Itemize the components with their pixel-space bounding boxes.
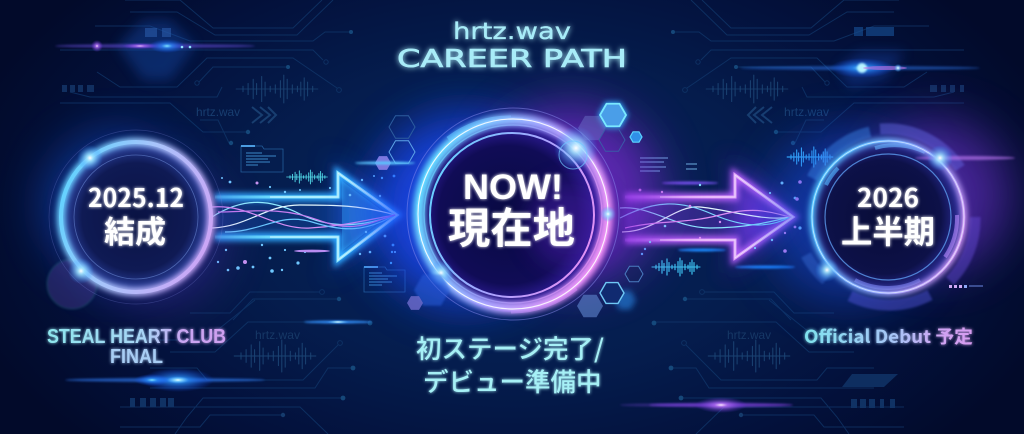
wave strands left — [212, 202, 395, 232]
particles — [217, 175, 802, 273]
data panels and small waveforms — [241, 146, 833, 292]
bright ring centre — [418, 119, 608, 309]
flare bottom right — [649, 397, 793, 413]
waveform above right — [787, 147, 833, 167]
hexagon glowing halo — [598, 102, 628, 128]
faint hexagon top left — [118, 20, 195, 80]
faint waveform top right — [706, 75, 788, 103]
hexagon outline — [389, 116, 415, 138]
faint label top right: hrtz.wav — [784, 105, 829, 119]
flare top left — [55, 39, 255, 53]
faint waveform bottom left — [234, 340, 316, 372]
particles around centre — [381, 175, 646, 264]
caption left line 1: STEAL HEART CLUB — [47, 326, 226, 348]
faint background marks — [62, 20, 964, 408]
flare small left — [304, 320, 372, 324]
date text: 2025.12 — [88, 178, 184, 215]
hexagon faint fill — [578, 116, 606, 140]
title — [397, 19, 627, 73]
partial ring segments centre — [448, 118, 576, 311]
segments inner right — [826, 145, 957, 288]
inner ring right — [825, 154, 951, 280]
ring glow centre — [419, 120, 607, 308]
arrow: right — [620, 155, 793, 277]
hexagon purple lower left — [407, 296, 423, 310]
hexagon glow lower right — [614, 290, 636, 310]
small dots right — [949, 285, 983, 288]
hexagon faint blue lower left — [414, 274, 450, 306]
faint label bottom right: hrtz.wav — [727, 328, 771, 342]
halo centre circle — [370, 105, 660, 305]
wave strands right — [620, 204, 790, 232]
hexagon small cyan — [630, 132, 642, 142]
title line 1: hrtz.wav — [453, 19, 571, 45]
circuit lines: left side — [60, 0, 372, 434]
arrow left shadow head — [325, 153, 397, 280]
arrow right shadow head — [723, 155, 793, 277]
disc centre circle — [416, 118, 610, 312]
bright ring core right — [812, 141, 964, 293]
ring glow right — [812, 141, 964, 293]
arrow left head fill — [342, 181, 388, 251]
hexagon glowing — [600, 104, 626, 126]
faint hexagon top right — [838, 52, 905, 88]
sparkles right — [815, 145, 1015, 282]
circle: 2025.12 — [45, 130, 223, 309]
ring glow left — [61, 142, 211, 292]
hexagons around centre — [355, 102, 643, 317]
arrow right outline — [625, 175, 793, 258]
caption: right: Official Debut 予定 — [804, 323, 973, 349]
hexagon outline right — [599, 129, 625, 151]
bright ring right — [812, 141, 964, 293]
caption: centre — [416, 329, 604, 399]
flare bottom edge right of centre — [620, 404, 700, 406]
arrow: left — [212, 153, 397, 280]
hexagon outline 2 — [389, 141, 415, 163]
hexagon outline lower right — [625, 266, 643, 282]
faint chevrons — [252, 107, 276, 123]
caption centre line 2: デビュー準備中 — [423, 362, 602, 399]
circuit lines: right side — [652, 0, 964, 434]
horizontal flare — [355, 162, 415, 164]
disc purple tint — [528, 183, 612, 267]
second ring centre — [424, 125, 602, 303]
inner ring left — [74, 155, 198, 279]
hexagon faint lower — [577, 295, 603, 317]
hexagon purple — [375, 156, 391, 170]
faint squares bottom right — [851, 399, 895, 408]
faint label bottom left: hrtz.wav — [255, 328, 300, 342]
data panel left upper — [241, 146, 283, 172]
faint label top left: hrtz.wav — [196, 105, 240, 119]
faint squares top right — [854, 27, 894, 36]
waveform below right arrow — [652, 258, 700, 276]
title line 2: CAREER PATH — [397, 44, 627, 73]
waveform above left arrow — [287, 170, 327, 184]
arrow right glow — [625, 175, 793, 258]
inner ring centre — [430, 133, 594, 297]
arrow left outline — [215, 173, 397, 260]
caption centre line 1: 初ステージ完了/ — [416, 329, 604, 366]
data text right — [640, 158, 697, 171]
particles right — [639, 180, 802, 253]
halo left circle — [45, 135, 223, 303]
particles left — [217, 175, 396, 273]
outer segments right — [806, 129, 975, 305]
caption left line 2: FINAL — [110, 346, 163, 368]
lens left circle — [47, 259, 97, 309]
caption: left — [47, 326, 226, 368]
current location text: 現在地 — [448, 195, 575, 256]
flare top right — [740, 58, 980, 78]
faint squares top center-left — [145, 28, 171, 37]
faint chevrons right — [748, 107, 772, 123]
sparkles left — [68, 145, 103, 284]
hexagon bright lower right — [600, 283, 624, 303]
faint waveform top left — [236, 75, 318, 103]
disc right circle — [812, 141, 964, 293]
outer thin ring left — [49, 130, 223, 304]
light flares — [55, 39, 980, 413]
faint squares bottom left — [130, 398, 174, 407]
halo right circle — [765, 120, 1010, 300]
circle: NOW — [370, 105, 660, 320]
arrow left core — [270, 173, 397, 260]
NOW text: NOW! — [463, 168, 563, 207]
bright ring core centre — [418, 119, 608, 309]
year text: 2026 — [857, 178, 919, 215]
sparkles centre — [428, 126, 616, 286]
bright ring left — [61, 142, 211, 292]
data panel left lower — [364, 267, 405, 292]
flare bottom left — [65, 368, 265, 392]
flare right of centre — [662, 182, 795, 268]
faint waveform bottom right — [708, 340, 790, 372]
first half text: 上半期 — [841, 207, 935, 253]
faint squares top left — [62, 85, 94, 92]
faint squares upper right — [930, 85, 964, 92]
arrow right core — [660, 175, 793, 258]
circle: 2026 — [765, 120, 1015, 305]
label text: 結成 — [104, 207, 166, 252]
faint panel bottom right — [842, 374, 898, 387]
disc left circle — [61, 142, 211, 292]
outer thin ring centre — [407, 108, 619, 320]
arrow left glow — [215, 173, 397, 260]
